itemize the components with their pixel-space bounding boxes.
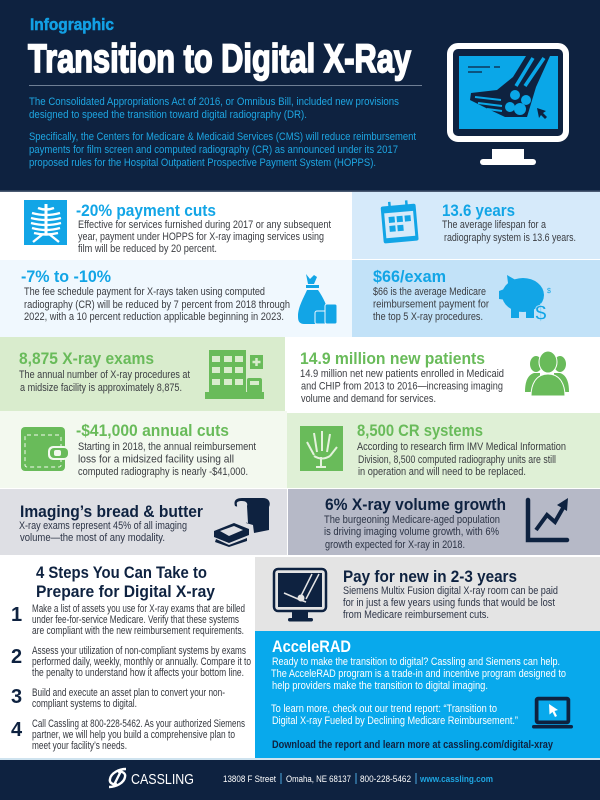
heading: Imaging’s bread & butter	[20, 502, 203, 521]
intro text: proposed rules for the Hospital Outpatient Prospective Payment System (HOPPS).	[29, 157, 376, 169]
body text	[300, 368, 504, 405]
icon: money bag	[298, 274, 337, 324]
body text	[324, 514, 500, 551]
title: Transition to Digital X-Ray	[28, 37, 412, 81]
heading: 14.9 million new patients	[300, 349, 485, 368]
panel: header	[0, 0, 600, 192]
body text: X-ray exams represent 45% of all imaging	[19, 520, 187, 532]
body text	[78, 441, 256, 478]
body text: To learn more, check out our trend report: “Transition to	[271, 703, 497, 715]
contact details: 800-228-5462	[360, 774, 411, 785]
icon: group of people	[525, 351, 569, 396]
logo: CASSLING	[131, 772, 194, 788]
step 1	[11, 603, 245, 637]
heading: -20% payment cuts	[76, 201, 216, 220]
step 4	[11, 718, 245, 752]
body text: Digital X-ray Fueled by Declining Medicare Reimbursement.”	[272, 715, 518, 727]
panel: -20% payment cuts	[0, 192, 352, 259]
panel: 8,500 CR systems	[287, 413, 600, 488]
step 2: 2	[11, 646, 22, 668]
panel: AcceleRAD	[255, 631, 600, 758]
body text: Starting in 2018, the annual reimbursement	[78, 441, 256, 453]
intro text: designed to speed the transition toward digital radiography (DR).	[29, 109, 307, 121]
panel: -$41,000 annual cuts	[0, 411, 287, 488]
heading: 6% X-ray volume growth	[325, 495, 506, 514]
step 1: 1	[11, 604, 22, 626]
body text: help providers make the transition to digital imaging.	[272, 680, 488, 692]
heading: 13.6 years	[442, 201, 515, 220]
steps heading: 4 Steps You Can Take to	[36, 563, 207, 582]
step 1: Make a list of assets you use for X-ray exams that are billed	[32, 603, 245, 615]
step 3: compliant systems to digital.	[32, 698, 137, 710]
icon: hand x-ray	[300, 426, 343, 471]
step 3: 3	[11, 686, 22, 708]
body text: The burgeoning Medicare-aged population	[324, 514, 500, 526]
heading: $66/exam	[373, 267, 446, 286]
body text: 14.9 million net new patients enrolled in Medicaid	[300, 368, 504, 380]
body text: film will be reduced by 20 percent.	[78, 243, 217, 255]
icon: bread	[214, 498, 270, 547]
step 4: meet your facility’s needs.	[32, 740, 127, 752]
contact details: www.cassling.com	[419, 774, 493, 785]
step 4: Call Cassling at 800-228-5462. As your authorized Siemens	[32, 718, 245, 730]
heading: 8,500 CR systems	[357, 421, 483, 440]
body text: from Medicare reimbursement cuts.	[343, 609, 489, 621]
step 1: under fee-for-service Medicare. Verify that these systems	[32, 614, 239, 626]
icon: small monitor with x-ray	[274, 569, 326, 622]
step 4: partner, we will help you build a comprehensive plan to	[32, 729, 235, 741]
footer	[0, 758, 600, 800]
body text	[343, 585, 558, 621]
steps heading	[36, 563, 215, 601]
intro text: The Consolidated Appropriations Act of 2016, or Omnibus Bill, included new provisions	[29, 96, 399, 108]
body text: growth expected for X-ray in 2018.	[325, 539, 465, 551]
step 3: Build and execute an asset plan to convert your non-	[32, 687, 225, 699]
body text: 2022, with a 10 percent reduction applicable beginning in 2023.	[24, 311, 284, 323]
body text: According to research firm IMV Medical Information	[357, 441, 566, 453]
heading: -$41,000 annual cuts	[76, 421, 229, 440]
heading: 8,875 X-ray exams	[19, 349, 154, 368]
body text	[442, 219, 576, 244]
body text: reimbursement payment for	[373, 298, 489, 310]
heading: -7% to -10%	[21, 267, 111, 286]
body text	[24, 286, 290, 323]
icon: piggy bank: $	[535, 302, 547, 325]
body text: Siemens Multix Fusion digital X-ray room can be paid	[343, 585, 558, 597]
step 3	[11, 686, 225, 710]
body text: loss for a midsized facility using all	[78, 454, 234, 466]
body text	[271, 656, 566, 727]
body text: the top 5 X-ray procedures.	[373, 311, 483, 323]
body text: Division, 8,500 computed radiography units are still	[358, 454, 556, 466]
icon: ribcage x-ray	[24, 200, 67, 245]
heading: Pay for new in 2-3 years	[343, 567, 517, 586]
body text: is driving imaging volume growth, with 6%	[324, 526, 499, 538]
icon: monitor with foot x-ray	[450, 46, 566, 165]
body text: Effective for services furnished during 2017 or any subsequent	[78, 219, 331, 231]
icon: piggy bank	[499, 275, 551, 325]
body text: computed radiography is nearly -$41,000.	[78, 466, 248, 478]
icon: wallet	[21, 427, 69, 471]
intro text	[29, 96, 417, 169]
step 1: are compliant with the new reimbursement requirements.	[32, 625, 244, 637]
body text: $66 is the average Medicare	[373, 286, 486, 298]
intro text: payments for film screen and computed radiography (CR) as announced under its 2017	[29, 144, 398, 156]
body text: volume—the most of any modality.	[20, 532, 165, 544]
icon: hospital	[205, 350, 264, 399]
step 4: 4	[11, 719, 23, 741]
body text: year, payment under HOPPS for X-ray imaging services using	[78, 231, 324, 243]
panel: $66/exam	[352, 260, 600, 337]
icon: laptop with cursor	[532, 698, 573, 728]
panel: 13.6 years	[352, 192, 600, 259]
step 2: performed daily, weekly, monthly or annually. Compare it to	[32, 656, 251, 668]
body text: The annual number of X-ray procedures at	[19, 369, 190, 381]
steps heading: Prepare for Digital X-ray	[36, 582, 215, 601]
body text: radiography (CR) will be reduced by 7 percent from 2018 through	[24, 299, 290, 311]
body text	[357, 441, 566, 478]
panel: 4 steps	[11, 563, 251, 752]
contact details: Omaha, NE 68137	[286, 774, 351, 785]
icon: calendar	[380, 200, 419, 243]
body text: for in just a few years using funds that would be lost	[343, 597, 555, 609]
heading: AcceleRAD	[272, 637, 351, 656]
icon: piggy bank: $	[547, 288, 551, 295]
panel: 8,875 X-ray exams	[0, 337, 285, 411]
body text: volume and demand for services.	[301, 393, 436, 405]
contact details: 13808 F Street	[223, 774, 276, 785]
intro text: Specifically, the Centers for Medicare & Medicaid Services (CMS) will reduce reimbursement	[29, 131, 417, 143]
step 2: Assess your utilization of non-compliant systems by exams	[32, 645, 246, 657]
body text	[78, 219, 331, 255]
panel: pay for new in 2-3 years	[255, 557, 600, 631]
panel: -7% to -10%	[0, 260, 352, 337]
body text	[373, 286, 489, 323]
body text: in operation and will need to be replaced.	[358, 466, 526, 478]
body text: and CHIP from 2013 to 2016—increasing imaging	[301, 380, 503, 392]
eyebrow label: Infographic	[30, 16, 114, 34]
body text: The fee schedule payment for X-rays taken using computed	[24, 286, 265, 298]
call to action: Download the report and learn more at cassling.com/digital-xray	[272, 739, 554, 751]
body text	[19, 369, 190, 394]
body text: a midsize facility is approximately 8,875.	[20, 382, 182, 394]
step 2	[11, 645, 251, 679]
logo	[109, 769, 194, 788]
panel: 14.9 million new patients	[285, 337, 600, 411]
step 2: the penalty to understand how it affects your bottom line.	[32, 667, 244, 679]
body text	[19, 520, 187, 544]
panel: 6% x-ray volume growth	[288, 489, 600, 555]
icon: rising line chart	[528, 498, 568, 540]
panel: imaging's bread and butter	[0, 489, 287, 555]
contact details	[223, 773, 493, 785]
body text: The average lifespan for a	[442, 219, 546, 231]
